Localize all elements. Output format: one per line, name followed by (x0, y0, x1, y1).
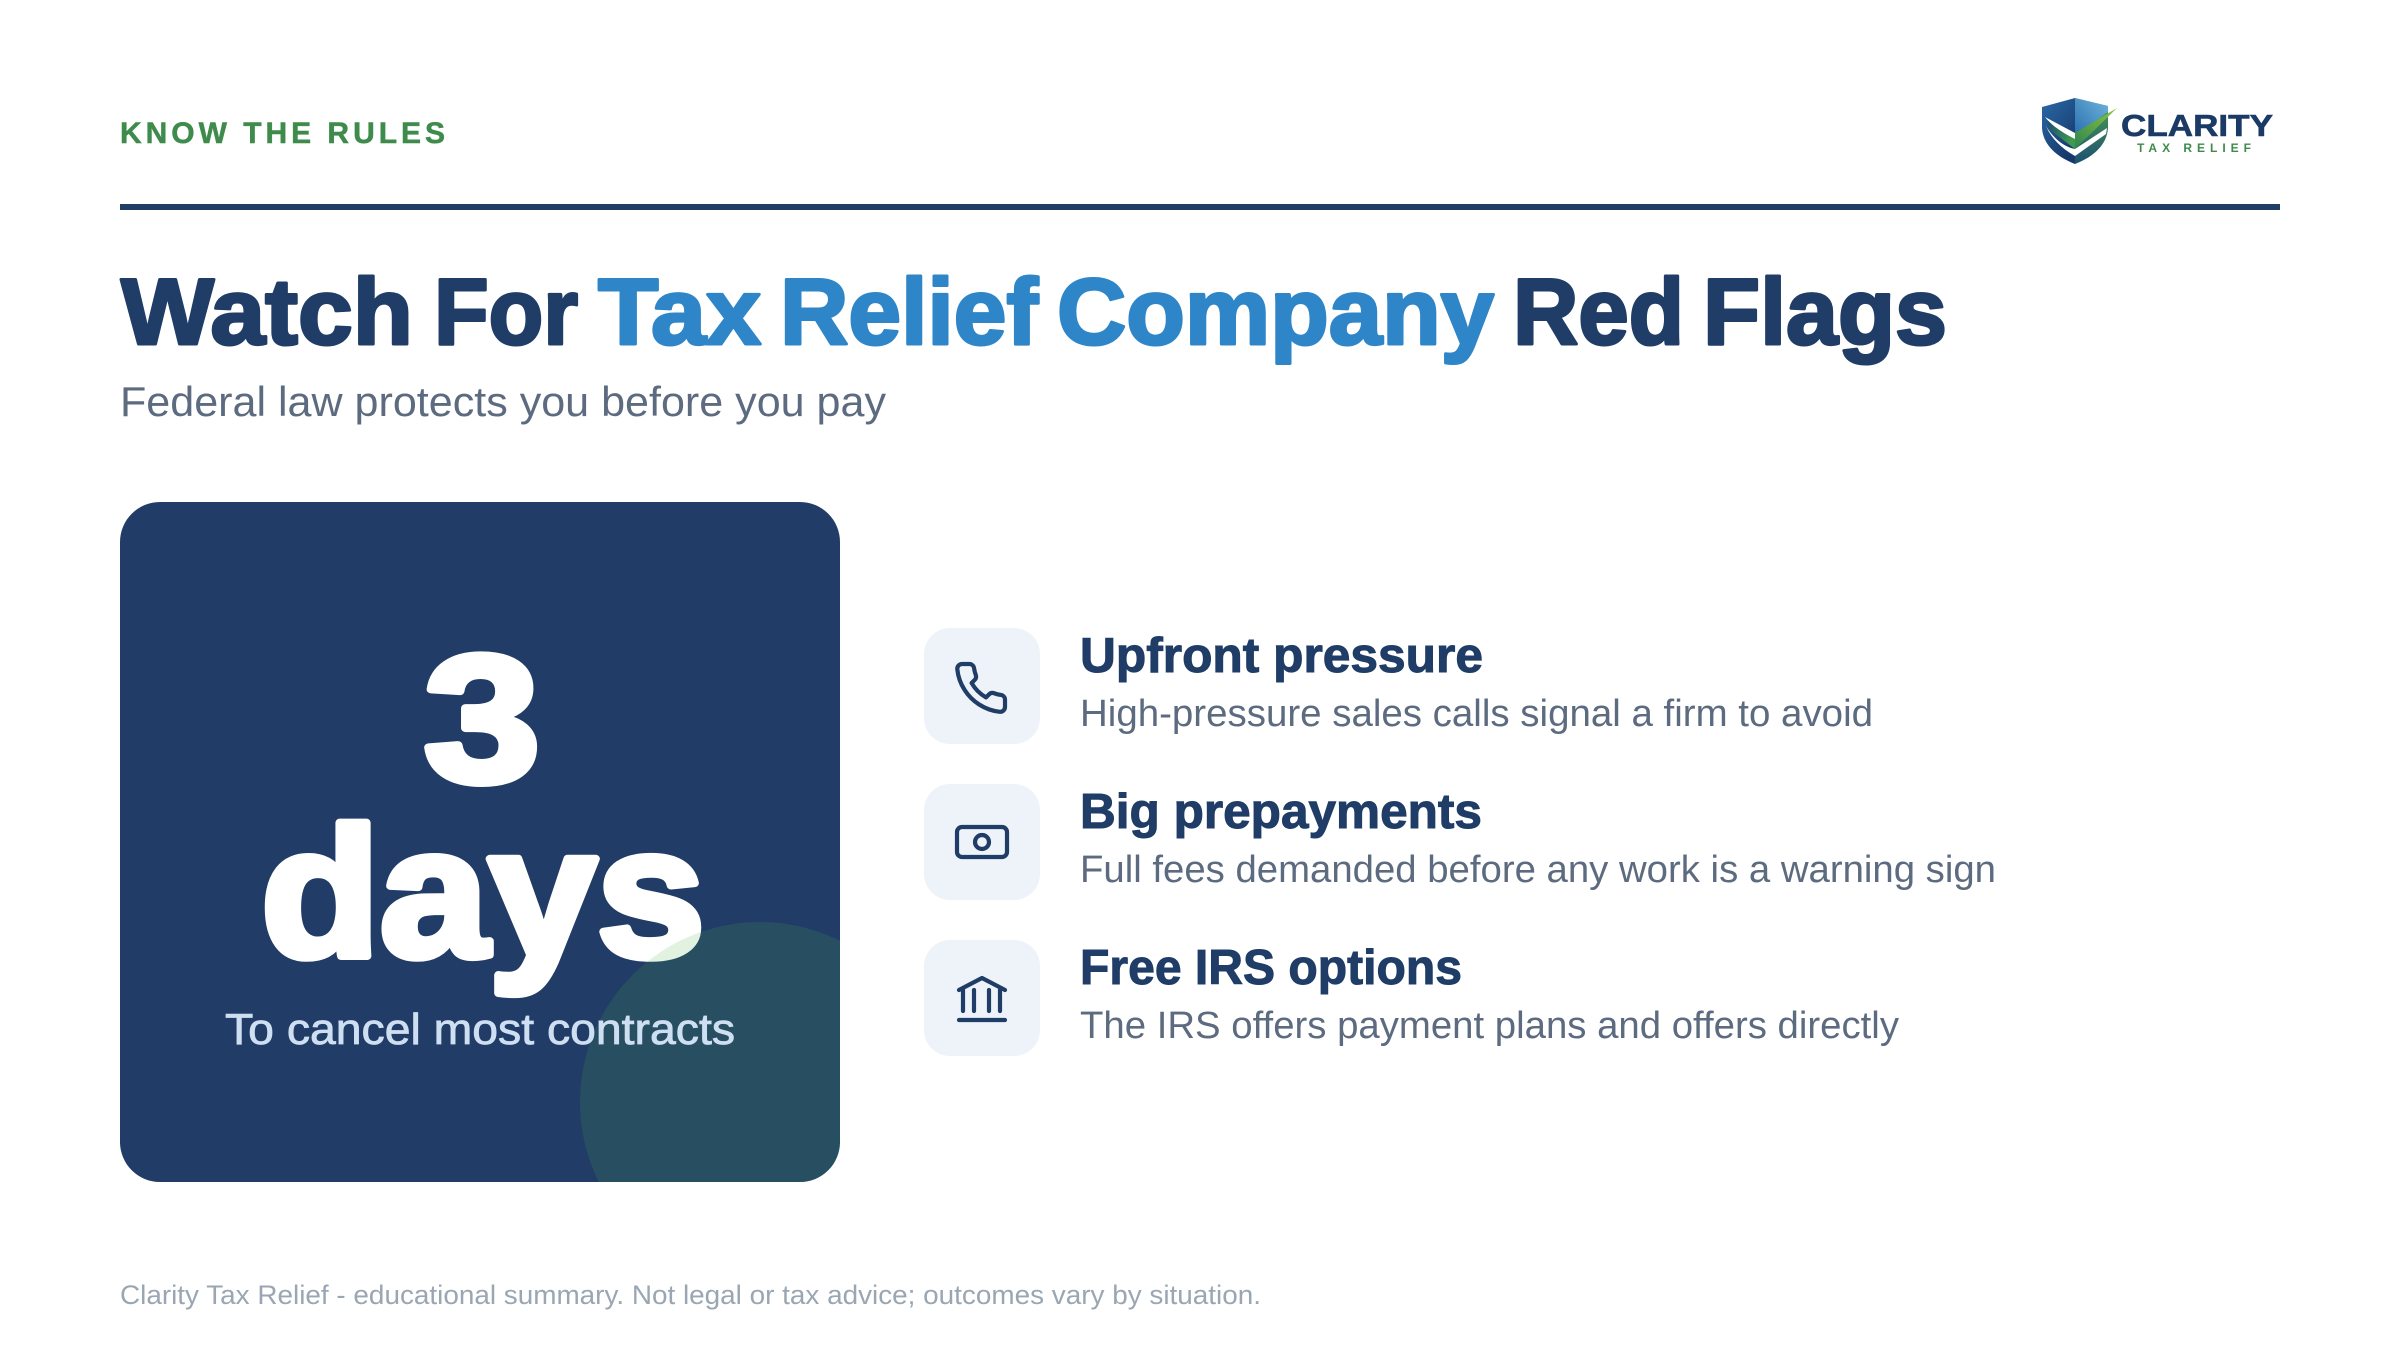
subtitle: Federal law protects you before you pay (120, 378, 886, 425)
title (121, 259, 1947, 364)
logo tagline: TAX RELIEF (2137, 141, 2251, 155)
item: upfront pressure (924, 628, 1873, 744)
footer disclaimer: Clarity Tax Relief - educational summary. Not legal or tax advice; outcomes vary by situation. (120, 1280, 1261, 1310)
heading: Big prepayments (1080, 785, 1482, 839)
logo wordmark: CLARITY (2121, 108, 2273, 143)
icon tile: bank (924, 940, 1040, 1056)
description: High-pressure sales calls signal a firm to avoid (1080, 693, 1873, 735)
icon: shield (2042, 98, 2117, 164)
heading: Upfront pressure (1080, 629, 1483, 683)
header rule (120, 204, 2280, 210)
title: For (434, 259, 578, 364)
title: Watch (121, 259, 413, 364)
big number: 3 (424, 619, 540, 820)
list: red flags (924, 628, 1996, 1056)
big unit: days (261, 789, 705, 995)
title: Flags (1703, 259, 1947, 364)
eyebrow: know the rules: KNOW THE RULES (120, 117, 445, 150)
title: Tax (598, 259, 761, 364)
item: free irs options (924, 940, 1899, 1056)
heading: Free IRS options (1080, 941, 1462, 995)
logo: Clarity Tax Relief (2042, 98, 2273, 164)
title: Relief (780, 259, 1039, 364)
card background (120, 502, 840, 1182)
title: Company (1057, 259, 1494, 364)
item: big prepayments (924, 784, 1996, 900)
decorative circle (580, 922, 840, 1182)
panel: 3 days stat card (120, 502, 840, 1182)
description: The IRS offers payment plans and offers directly (1080, 1005, 1899, 1047)
description: Full fees demanded before any work is a warning sign (1080, 849, 1996, 891)
stat caption: To cancel most contracts (225, 1005, 735, 1054)
icon tile: phone (924, 628, 1040, 744)
icon tile: cash (924, 784, 1040, 900)
title: Red (1513, 259, 1684, 364)
